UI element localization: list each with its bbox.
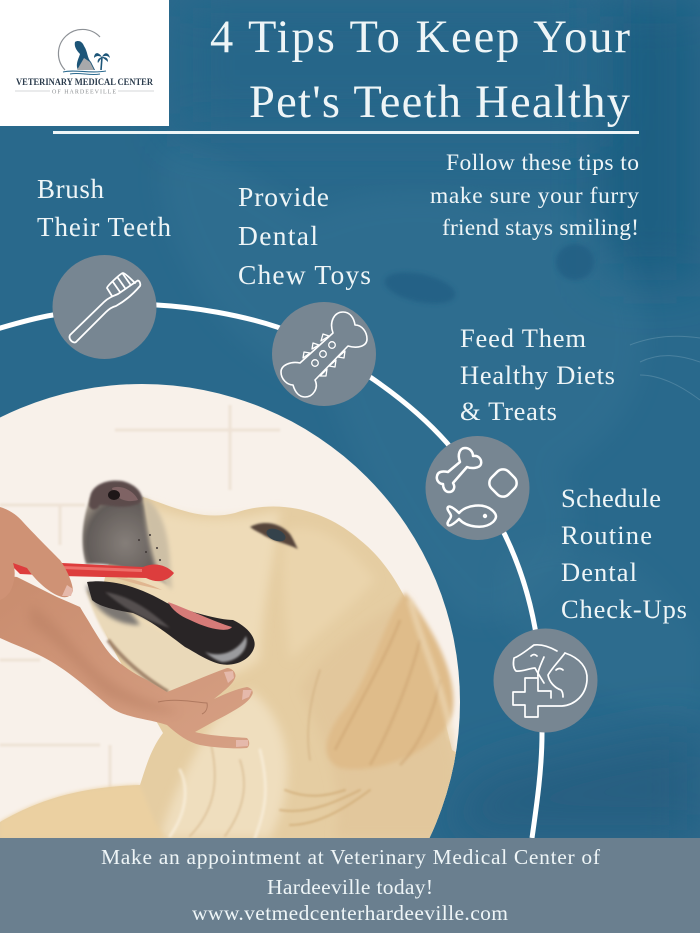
tip 3 label <box>460 323 615 426</box>
ear <box>326 592 454 769</box>
tip 4 label: Check-Ups <box>561 594 687 624</box>
photo: golden retriever having teeth brushed <box>0 384 470 850</box>
hand and arm <box>0 575 253 748</box>
tip 4 label: Schedule <box>561 483 661 513</box>
title: 4 Tips To Keep Your <box>210 12 630 63</box>
intro text: Follow these tips to <box>446 150 639 176</box>
icon: dog, cat and medical cross <box>494 628 598 732</box>
title: Pet's Teeth Healthy <box>249 77 631 128</box>
icon: toothbrush <box>52 255 156 359</box>
tip 3 label: Feed Them <box>460 323 586 353</box>
tip 2 label <box>238 181 371 290</box>
logo mark <box>58 29 110 75</box>
eye <box>250 523 298 549</box>
upper muzzle <box>83 492 168 585</box>
tip 2 label: Dental <box>238 220 318 251</box>
tip 2 label: Provide <box>238 181 329 212</box>
icon: treats <box>426 436 530 540</box>
footer text: www.vetmedcenterhardeeville.com <box>192 901 508 925</box>
logo panel <box>0 0 169 126</box>
dog body and head <box>0 497 470 850</box>
tip 1 label: Brush <box>37 174 104 204</box>
intro text <box>430 150 639 241</box>
fur strands <box>170 670 370 838</box>
timeline arc <box>0 305 542 838</box>
tip 1 label <box>37 174 172 242</box>
tip 4 label: Dental <box>561 557 637 587</box>
tip 2 label: Chew Toys <box>238 259 371 290</box>
intro text: friend stays smiling! <box>442 215 639 241</box>
footer text <box>101 845 601 925</box>
nose <box>89 481 142 510</box>
footer text: Hardeeville today! <box>267 875 433 899</box>
brick joints <box>0 405 280 790</box>
upper finger <box>0 507 73 600</box>
icon: dental chew bone <box>272 302 376 406</box>
logo panel: OF HARDEEVILLE <box>52 90 116 96</box>
tip 1 label: Their Teeth <box>37 212 172 242</box>
tip 3 label: Healthy Diets <box>460 360 615 390</box>
tip 4 label: Routine <box>561 520 652 550</box>
jaw shadow above the hand <box>108 640 168 692</box>
title <box>53 12 639 134</box>
footer text: Make an appointment at Veterinary Medical Center of <box>101 845 601 869</box>
open mouth and lower lip <box>87 581 255 665</box>
intro text: make sure your furry <box>430 183 639 209</box>
footer banner <box>0 838 700 933</box>
tip 4 label <box>561 483 687 624</box>
logo name: VETERINARY MEDICAL CENTER <box>16 77 153 87</box>
toothbrush <box>13 563 174 582</box>
lower jaw fur <box>86 590 202 692</box>
tip 3 label: & Treats <box>460 396 557 426</box>
